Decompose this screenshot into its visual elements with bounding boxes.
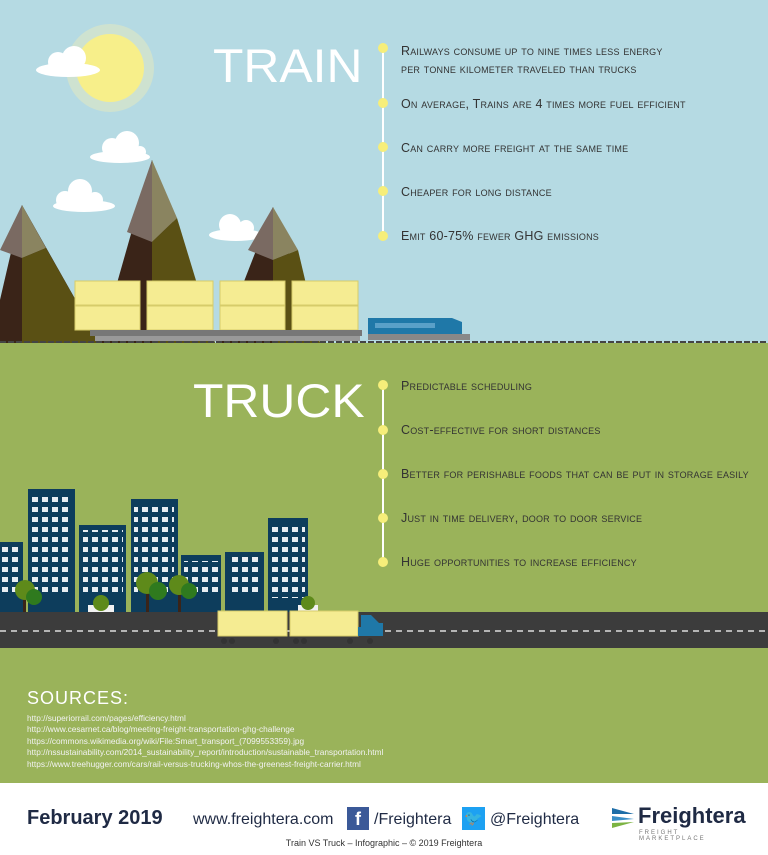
buildings [0,489,308,612]
heading: TRAIN: TRAIN [213,39,362,92]
train with containers [75,281,470,341]
logo: Freightera: FREIGHT MARKETPLACE [639,830,706,842]
copyright: Train VS Truck – Infographic – © 2019 Freightera [286,838,482,848]
icon: clouds [36,46,263,241]
icon: sun [66,24,154,112]
train illustration [0,24,766,343]
sources list: http://nssustainability.com/2014_sustainability_report/introduction/sustainable_transportation.html [27,747,383,757]
trees [15,572,318,615]
mountains [0,160,320,343]
rail track [0,341,768,343]
truck [218,611,383,644]
panel: truck green background [0,343,768,783]
road [0,612,768,648]
footer date: February 2019 [27,807,163,829]
sources list: https://www.treehugger.com/cars/rail-versus-trucking-whos-the-greenest-freight-carrier.html [27,759,361,769]
heading: TRUCK: TRUCK [193,374,365,427]
truck fact 3: Better for perishable foods that can be put in storage easily [401,467,749,481]
sources list: http://www.cesarnet.ca/blog/meeting-freight-transportation-ghg-challenge [27,724,294,734]
icon: facebook [347,807,369,830]
icon: twitter [462,807,485,830]
truck fact 2: Cost-effective for short distances [401,423,601,437]
train fact 1: Railways consume up to nine times less energy [401,44,663,58]
icon: facebook: f [355,809,361,829]
truck fact 5: Huge opportunities to increase efficiency [401,555,637,569]
city and road illustration [0,489,768,648]
train fact 4: Cheaper for long distance [401,185,552,199]
facebook handle: /Freightera [374,811,451,828]
twitter handle: @Freightera [490,811,579,828]
sources list: http://superiorrail.com/pages/efficiency.html [27,713,186,723]
train fact 1 [401,44,663,76]
sources heading: SOURCES: [27,688,129,708]
train fact 3: Can carry more freight at the same time [401,141,628,155]
train fact 1: per tonne kilometer traveled than trucks [401,62,637,76]
footer website: www.freightera.com [193,811,334,828]
logo: Freightera: Freightera [638,803,746,828]
train fact 5: Emit 60-75% fewer GHG emissions [401,229,599,243]
sources list: https://commons.wikimedia.org/wiki/File:Smart_transport_(7099553359).jpg [27,736,304,746]
timeline: truck benefits [378,380,388,567]
icon: twitter: 🐦 [464,810,483,827]
sources list [27,713,383,769]
panel: train sky background [0,0,768,343]
timeline: train benefits [378,43,388,241]
train fact 2: On average, Trains are 4 times more fuel efficient [401,97,686,111]
truck fact 1: Predictable scheduling [401,379,532,393]
logo: Freightera [612,803,746,842]
truck fact 4: Just in time delivery, door to door service [401,511,642,525]
